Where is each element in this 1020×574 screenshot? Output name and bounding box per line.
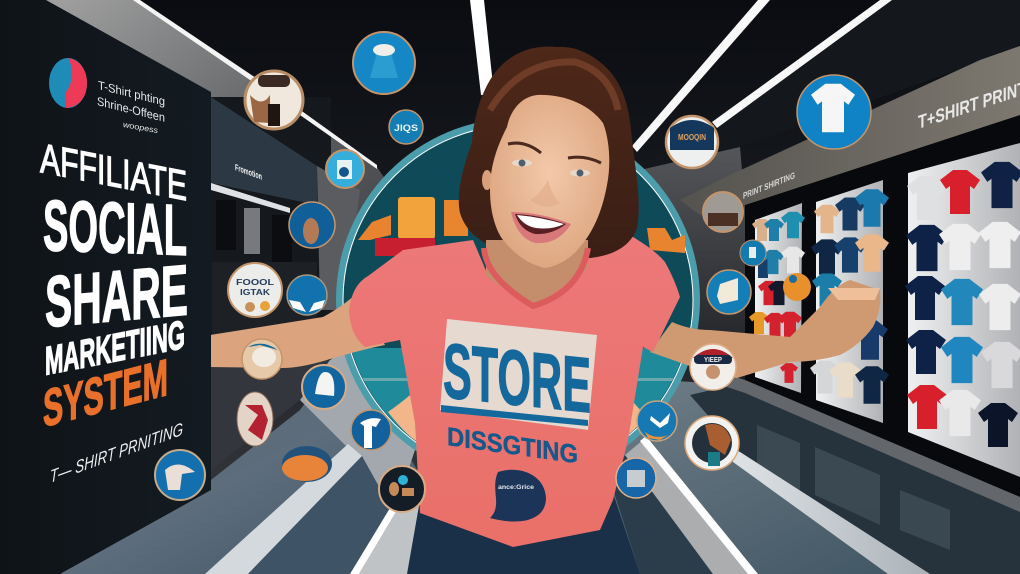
right arm and hand	[650, 280, 880, 378]
floor reflections	[757, 425, 950, 550]
bubble: small blue icon	[740, 240, 766, 266]
circle right product art	[647, 228, 685, 253]
small wall sign text: PRINT SHIRTING	[743, 170, 795, 201]
ceiling light strips	[133, 0, 892, 169]
bubble: white sign: IGTAK	[240, 288, 270, 297]
bubble: orange blob	[783, 273, 811, 301]
neck	[486, 240, 588, 309]
floor dark reflections area	[690, 385, 1020, 574]
bubble: tan collage	[245, 71, 303, 129]
display panel 2	[810, 180, 889, 423]
poster logo	[49, 58, 87, 108]
cream patch	[440, 319, 597, 430]
bubble: white sign: FOOOL	[236, 278, 274, 287]
circle left product art	[358, 197, 468, 256]
bubble: blue scene	[289, 202, 335, 248]
eyes	[512, 160, 590, 176]
face	[490, 95, 609, 268]
bubble: store photo	[703, 192, 743, 232]
poster small heading: woopess	[123, 120, 158, 135]
poster small heading	[97, 78, 165, 135]
bubble: brown object	[685, 416, 739, 470]
bubble: small blue text	[389, 110, 423, 144]
nose shadow	[530, 180, 560, 207]
hair highlight	[490, 62, 618, 110]
bubble: navy badge: MOOQIN	[678, 133, 706, 142]
collar	[484, 248, 588, 306]
right side wall	[640, 147, 745, 380]
poster title: MARKETIING	[45, 311, 185, 384]
navy badge: ance:Grice	[498, 485, 535, 491]
bubble: cyan lock	[326, 150, 364, 188]
poster title: AFFILIATE	[40, 134, 187, 209]
print underline	[441, 405, 588, 426]
bubble: orange oval	[282, 446, 332, 482]
bubble: blue shirt large	[353, 32, 415, 94]
bubble: poster hand	[155, 450, 205, 500]
circle lower teal band	[352, 348, 680, 441]
poster small heading: T-Shirt phting	[98, 78, 165, 109]
bubble: blue hand	[302, 365, 346, 409]
right ceiling dark zone	[640, 0, 1020, 170]
bubble: blue white collar	[287, 275, 327, 315]
hanging clothes	[216, 200, 292, 263]
bubble: red pattern blob	[237, 392, 273, 446]
poster title: SHARE	[45, 251, 188, 343]
bubble: portrait badge	[690, 344, 736, 390]
floor beam and line left	[205, 444, 425, 574]
left soffit	[40, 0, 420, 300]
bubble: small blue text: JIQS	[394, 123, 418, 133]
left arm	[210, 292, 385, 368]
bubble: dark objects	[379, 466, 425, 512]
floor right	[610, 380, 1020, 574]
jeans	[407, 490, 640, 574]
bubble: white sign	[228, 263, 282, 317]
navy badge	[490, 470, 546, 521]
hand fingers highlight	[828, 288, 880, 300]
floor light beam right	[733, 450, 930, 574]
poster title	[40, 134, 188, 439]
bubble: blue map	[707, 270, 751, 314]
bubble: blue cloth	[616, 458, 656, 498]
shirt print	[440, 319, 597, 521]
eyebrows	[508, 143, 601, 163]
store title: STORE	[443, 326, 591, 430]
print subtitle: DISSGTING	[447, 421, 578, 469]
hair	[459, 47, 639, 258]
central circle	[336, 123, 700, 451]
poster small heading: Shrine-Offeen	[97, 94, 165, 125]
bubble: sand	[242, 339, 282, 379]
woman figure	[210, 47, 880, 574]
floor lanes right	[610, 436, 758, 574]
ear	[482, 170, 492, 190]
grey wall band	[680, 46, 1020, 215]
display panel 3	[905, 143, 1020, 477]
poster title: SOCIAL	[43, 186, 187, 271]
wall base strip	[700, 366, 1020, 512]
bubble: portrait badge: YIEEP	[704, 357, 722, 364]
bubble: blue T icon	[351, 410, 391, 450]
smile	[511, 212, 571, 243]
poster footer text: T— SHIRT PRNITING	[50, 418, 183, 487]
light lane beside circle	[300, 350, 415, 510]
bubble: navy badge	[666, 116, 718, 168]
dark store floor under arm	[211, 360, 330, 470]
floor left	[60, 350, 480, 574]
right wall dark section	[745, 115, 1020, 497]
poster title: SYSTEM	[43, 348, 168, 439]
display panel 1	[749, 203, 805, 393]
left store interior	[211, 97, 360, 387]
left poster panel	[0, 0, 211, 574]
bubble: blue check	[637, 401, 677, 441]
bubble: white shirt large	[797, 75, 871, 149]
store sign: Fromotion	[235, 162, 262, 182]
t-shirt	[349, 237, 680, 547]
